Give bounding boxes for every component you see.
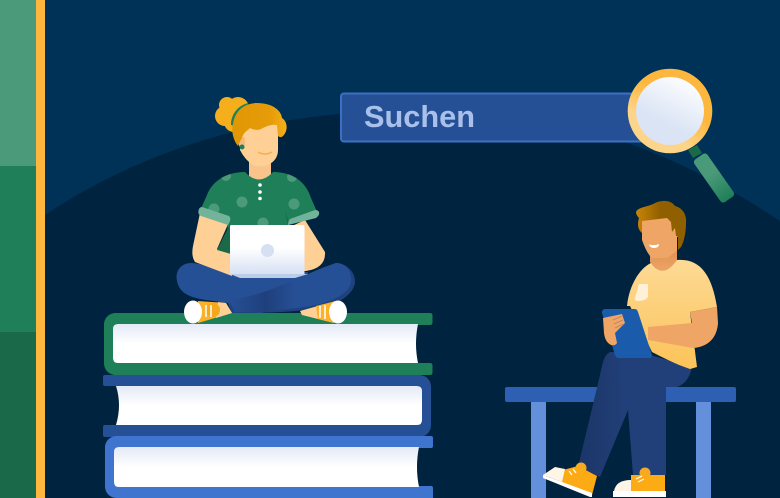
hair bun <box>215 97 250 132</box>
arm <box>648 307 718 348</box>
bench <box>505 387 736 498</box>
neck <box>650 240 677 272</box>
shirt <box>198 171 319 254</box>
crossed legs <box>177 263 355 313</box>
pocket <box>635 284 648 301</box>
shoe: right <box>300 300 347 324</box>
man with tablet <box>543 201 718 497</box>
shoe: left <box>184 300 232 324</box>
book stack <box>103 313 433 498</box>
book: blue <box>105 436 433 498</box>
book: navy <box>103 375 431 437</box>
icon: magnifying glass <box>628 69 735 204</box>
sleeve cuffs <box>198 207 230 225</box>
shoe: left <box>543 462 597 497</box>
hair <box>232 103 287 146</box>
arms <box>192 213 325 276</box>
left colour strip <box>0 0 45 498</box>
hair band <box>231 103 250 126</box>
search label: Suchen <box>364 99 475 134</box>
search bar <box>341 94 651 142</box>
shoe: right <box>613 468 666 497</box>
hair <box>636 201 686 250</box>
torso <box>627 260 717 369</box>
woman with laptop <box>177 97 355 324</box>
tablet <box>602 309 652 358</box>
legs <box>578 352 692 477</box>
book: green <box>104 313 432 375</box>
laptop <box>230 225 308 278</box>
neck <box>249 155 271 182</box>
head <box>642 215 677 258</box>
face <box>240 124 278 166</box>
hand <box>603 314 625 345</box>
